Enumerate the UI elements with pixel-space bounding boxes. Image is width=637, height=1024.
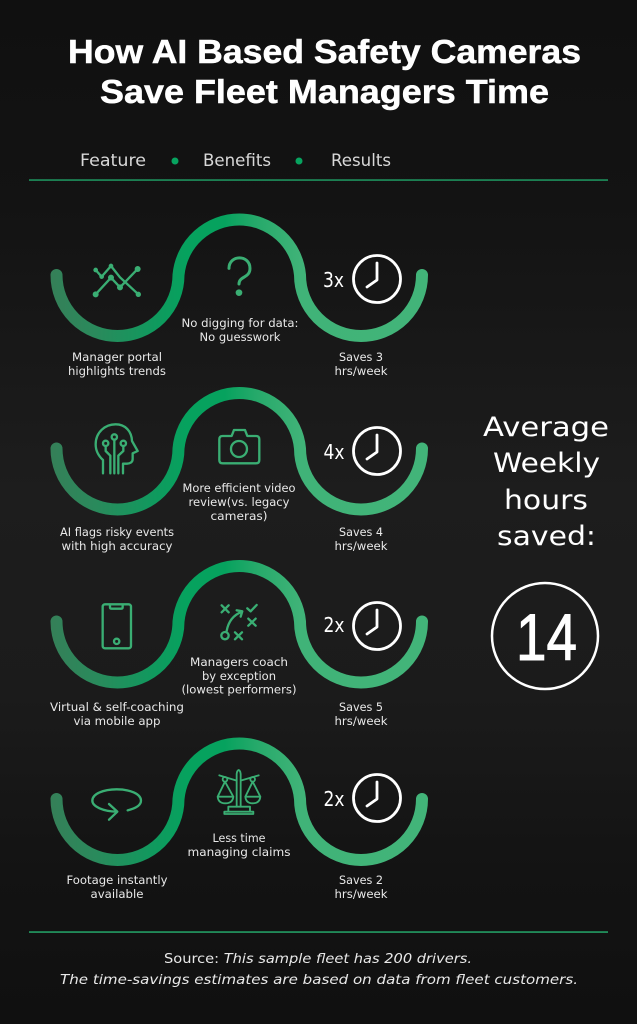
icon: scales of justice: [218, 770, 260, 814]
icon: playbook: [221, 605, 257, 639]
average weekly hours label: saved:: [497, 521, 596, 552]
average weekly hours label: Weekly: [493, 448, 600, 479]
feature text: Footage instantly: [66, 873, 168, 887]
source note: The time-savings estimates are based on data from fleet customers.: [60, 972, 578, 988]
column headers: Benefits: [203, 151, 271, 171]
multiplier: 3x: [323, 268, 344, 292]
row 4: footage: managing claims: [188, 845, 291, 859]
benefit text: Less time: [212, 831, 266, 845]
wave 4: [56, 744, 422, 860]
row 3: virtual coaching: via mobile app: [74, 714, 160, 728]
icon: clock: [354, 256, 400, 302]
row 3: virtual coaching: [50, 566, 422, 728]
icon: clock: [354, 602, 400, 650]
row 2: AI flags: [56, 393, 422, 553]
icon: phone: [103, 604, 131, 648]
title: How AI Based Safety Cameras: [68, 33, 581, 70]
row 4: footage: [56, 744, 422, 901]
multiplier: 2x: [324, 613, 345, 637]
icon: clock: [354, 774, 400, 822]
row 4: footage: hrs/week: [334, 887, 388, 901]
source note: Source: This sample fleet has 200 drivers.: [164, 951, 472, 967]
row 1: manager portal: No guesswork: [200, 330, 281, 344]
row 3: virtual coaching: by exception: [202, 669, 276, 683]
column headers: Results: [331, 151, 391, 171]
icon: clock: [354, 428, 400, 474]
total hours badge: 14: [516, 600, 577, 674]
row 1: manager portal: highlights trends: [68, 364, 166, 378]
feature text: Manager portal: [72, 350, 162, 364]
average weekly hours label: [483, 412, 609, 552]
row 4: footage: available: [90, 887, 144, 901]
result text: Saves 5: [339, 700, 383, 714]
wave 3: [56, 566, 422, 682]
row 1: manager portal: hrs/week: [334, 364, 388, 378]
average weekly hours label: hours: [504, 485, 588, 516]
icon: trend chart: [93, 264, 141, 297]
source note: [60, 951, 578, 988]
average weekly hours label: Average: [483, 412, 609, 443]
result text: Saves 4: [339, 525, 383, 539]
benefit text: No digging for data:: [182, 316, 298, 330]
benefit text: Managers coach: [190, 655, 288, 669]
row 3: virtual coaching: (lowest performers): [182, 682, 296, 696]
row 3: virtual coaching: hrs/week: [334, 714, 388, 728]
multiplier: 4x: [324, 440, 345, 464]
wave 2: [56, 393, 422, 509]
icon: AI head: [96, 424, 138, 473]
title: [68, 33, 581, 110]
row 1: manager portal: [56, 220, 422, 378]
title: Save Fleet Managers Time: [100, 73, 549, 110]
icon: question mark: [229, 258, 250, 296]
icon: camera: [219, 430, 259, 463]
row 2: AI flags: hrs/week: [334, 539, 388, 553]
row 2: AI flags: cameras): [210, 509, 268, 523]
column headers: Feature: [80, 151, 146, 171]
result text: Saves 2: [339, 873, 383, 887]
row 2: AI flags: review(vs. legacy: [188, 495, 290, 509]
multiplier: 2x: [324, 787, 345, 811]
benefit text: More efficient video: [182, 481, 296, 495]
total hours badge: [492, 583, 598, 689]
feature text: Virtual & self-coaching: [50, 700, 184, 714]
column headers: [80, 151, 391, 171]
result text: Saves 3: [339, 350, 383, 364]
wave 1: [56, 220, 422, 336]
feature text: AI flags risky events: [60, 525, 174, 539]
row 2: AI flags: with high accuracy: [62, 539, 173, 553]
icon: rotate arrow: [92, 789, 141, 820]
